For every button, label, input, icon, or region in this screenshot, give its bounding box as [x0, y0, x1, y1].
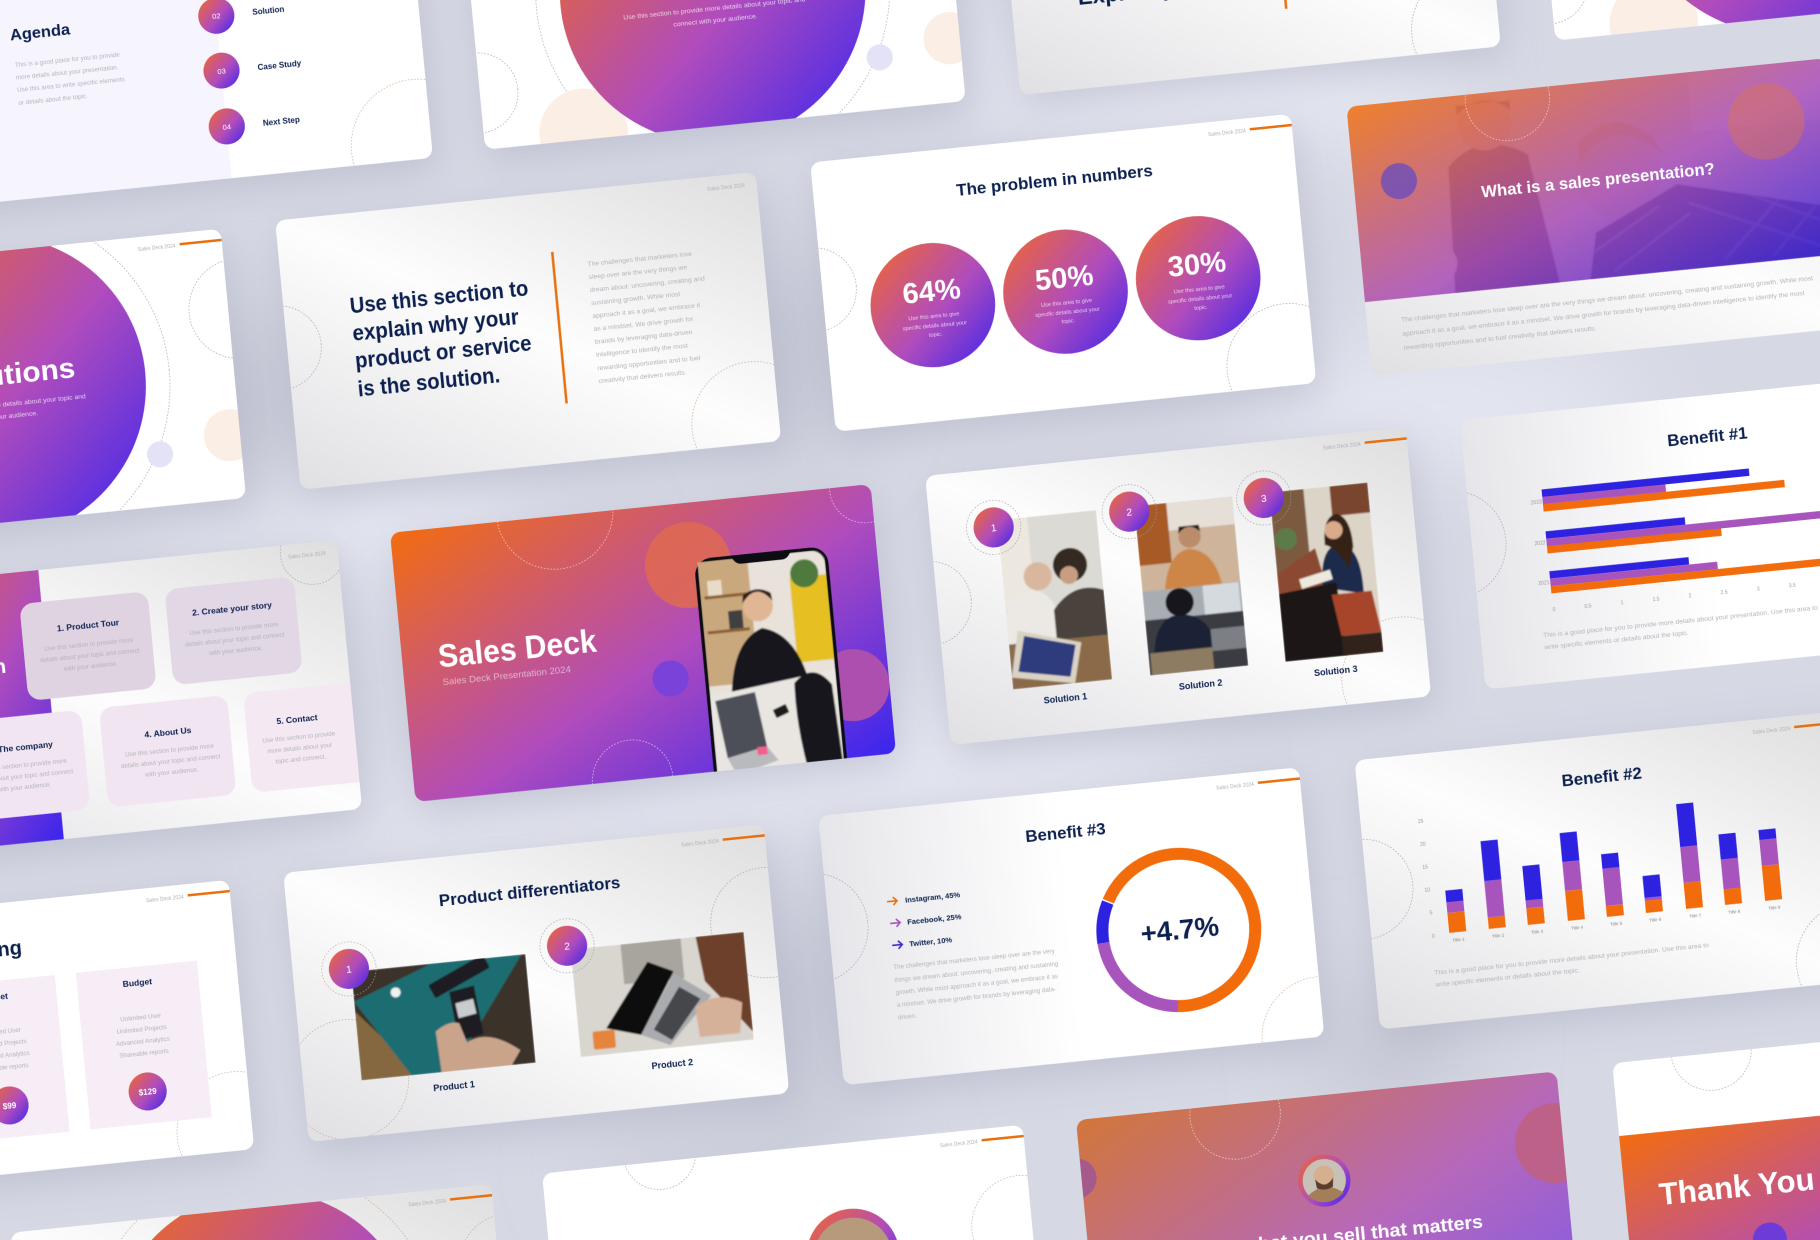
label: product 2: Product 2 — [651, 1057, 693, 1071]
card: contact: 5. Contact — [276, 712, 318, 726]
legend: instagram: Instagram, 45% — [905, 890, 961, 905]
agenda item 04: Next Step — [262, 115, 300, 128]
text: paragraph: The challenges that marketers lose sleep over are the very — [893, 948, 1056, 971]
stacked bar chart: 0 — [1432, 933, 1435, 940]
text: paragraph: rewarding opportunities and to fuel creativity that delivers results. — [1403, 325, 1597, 352]
number badge 2: 2 — [564, 942, 571, 953]
stacked bar chart: 10 — [1424, 888, 1431, 894]
panel: pricing slide: Sales Deck 2024 — [146, 895, 184, 904]
card: the company — [0, 710, 90, 822]
stacked bar chart: Title 4 — [1571, 924, 1584, 931]
card: about us: with your audience. — [144, 766, 199, 779]
heading: why your product: Use this section to — [349, 276, 529, 319]
number badge 3: 3 — [1261, 494, 1268, 505]
panel: benefit 1 slide — [1386, 371, 1820, 697]
heading: what is a sales presentation: What is a sales presentation? — [1480, 159, 1716, 202]
panel: sales deck cover slide — [384, 418, 934, 899]
stacked bar chart: Title 7 — [1689, 912, 1702, 919]
stacked bar chart: Title 8 — [1728, 908, 1741, 915]
round photo with gradient ring — [803, 1204, 903, 1240]
stacked bar chart: 5 — [1429, 910, 1433, 917]
card: create your story — [164, 576, 303, 685]
panel: benefit 3 slide — [747, 761, 1388, 1152]
stacked bar chart: Title 9 — [1768, 904, 1781, 911]
stat: 64%: specific details about your — [902, 320, 967, 332]
heading: why your product — [349, 276, 537, 401]
heading: benefit 2: Benefit #2 — [1561, 764, 1643, 791]
photo: two people with colour overlay — [1347, 58, 1820, 302]
heading: why your product: is the solution. — [357, 362, 501, 401]
text: agenda description: more details about your presentation. — [16, 64, 119, 82]
agenda item 02: Solution — [252, 5, 285, 17]
stacked bar chart — [1418, 784, 1783, 945]
horizontal bar chart: 2023 — [1530, 500, 1542, 507]
number badge 1 — [964, 498, 1023, 557]
number badge 2 — [1100, 482, 1159, 541]
text: paragraph: driven. — [898, 1012, 917, 1021]
stacked bar chart: 15 — [1422, 865, 1428, 871]
legend: facebook — [890, 912, 962, 928]
heading: product differentiators: Product differentiators — [438, 873, 621, 910]
text: chart description: write specific elements or details about the topic. — [1543, 630, 1689, 651]
panel: section slide top right — [1552, 0, 1820, 40]
panel: benefit 2 slide — [1300, 706, 1820, 1075]
horizontal bar chart: 2022 — [1534, 540, 1546, 548]
card: about us: 4. About Us — [144, 725, 192, 739]
panel: solutions photos slide: Sales Deck 2024 — [1323, 442, 1361, 452]
text: paragraph: growth. While most approach it as a goal, we embrace it as — [895, 973, 1058, 996]
panel: section slide bottom — [7, 1137, 581, 1240]
card: product tour: details about your topic and connect — [40, 647, 140, 664]
card: about us: Use this section to provide more — [125, 742, 215, 758]
card: product tour: Use this section to provide more — [44, 637, 134, 653]
panel: section slide bottom: Sales Deck 2024 — [408, 1199, 447, 1208]
agenda item 02: 02 — [212, 11, 221, 21]
stacked bar chart: 25 — [1418, 819, 1424, 825]
card: budget plan: Shareable reports — [119, 1048, 169, 1060]
heading: problem in numbers: The problem in numbers — [955, 161, 1153, 200]
panel: product differentiators slide: Sales Deck 2024 — [681, 839, 719, 849]
stat: 30%: Use this area to give — [1174, 285, 1225, 296]
heading: why your product: product or service — [354, 331, 532, 373]
agenda item 03: Case Study — [257, 58, 302, 72]
agenda item 04: 04 — [222, 122, 231, 132]
stat: 64%: topic. — [929, 331, 943, 339]
heading: benefit 1: Benefit #1 — [1666, 423, 1748, 450]
number badge 3 — [1234, 468, 1293, 528]
text: paragraph: The challenges that marketers lose — [587, 251, 692, 268]
horizontal bar chart — [1530, 449, 1820, 614]
text: section description: connect with your audience. — [673, 13, 758, 29]
legend: instagram — [887, 890, 961, 907]
photo: solution 3 — [1272, 482, 1384, 662]
photo: product 2 — [572, 932, 754, 1057]
stat: 50%: specific details about your — [1035, 306, 1100, 319]
legend: twitter — [892, 935, 953, 950]
label: solution 3: Solution 3 — [1314, 664, 1358, 678]
panel: pricing slide — [0, 875, 303, 1239]
legend: facebook: Facebook, 25% — [907, 912, 962, 927]
text: agenda description: or details about the topic. — [18, 93, 88, 107]
panel: section slide top — [471, 0, 965, 149]
card: about us — [99, 695, 236, 808]
stat: 30%: topic. — [1194, 304, 1208, 312]
text: paragraph: a mindset. We drive growth for brands by leveraging data- — [897, 986, 1056, 1009]
legend: twitter: Twitter, 10% — [909, 935, 953, 949]
horizontal bar chart: 2021 — [1538, 580, 1550, 587]
agenda item 02 — [197, 0, 286, 36]
text: paragraph: as a mindset. We drive growth for — [593, 316, 694, 333]
stacked bar chart: Title 3 — [1531, 928, 1544, 935]
horizontal bar chart: 0.5 — [1584, 603, 1592, 610]
card: create your story: details about your topic and connect — [185, 632, 285, 649]
card: contact: more details about your — [267, 742, 333, 755]
horizontal bar chart: 0 — [1552, 607, 1556, 613]
number badge 1: 1 — [990, 523, 998, 535]
donut chart: +4.7% — [1139, 911, 1220, 949]
panel: explain slide top — [1011, 0, 1500, 94]
phone mockup with photo — [694, 546, 856, 868]
panel: why your product slide: Sales Deck 2024 — [707, 183, 745, 193]
stat: 30% — [1130, 210, 1266, 346]
heading: benefit 3: Benefit #3 — [1025, 819, 1106, 846]
label: product 1: Product 1 — [433, 1079, 475, 1093]
card: target plan: $99 — [2, 1101, 17, 1111]
card: product tour — [19, 591, 157, 701]
horizontal bar chart: 3.5 — [1789, 583, 1796, 589]
stat: 50%: Use this area to give — [1041, 298, 1092, 309]
text: chart description: This is a good place for you to provide more details about your presentation. Use this area to — [1434, 942, 1709, 977]
stat: 50%: 50% — [1034, 260, 1095, 298]
number badge 1 — [319, 939, 379, 999]
card: contact: topic and connect. — [275, 753, 327, 765]
panel: problem in numbers slide: Sales Deck 2024 — [1208, 128, 1246, 138]
text: paragraph — [1401, 275, 1816, 352]
text: agenda description: This is a good place for you to provide — [15, 52, 121, 69]
stat: 50%: topic. — [1061, 318, 1076, 325]
stat: 50% — [998, 224, 1133, 360]
card: budget plan: Unlimited User — [120, 1013, 161, 1024]
agenda item 03: 03 — [217, 66, 226, 76]
text: paragraph: brands by leveraging data-driven — [595, 329, 693, 346]
number badge 2: 2 — [1126, 507, 1133, 519]
text: agenda description — [15, 51, 126, 107]
panel: topics slide — [0, 516, 383, 858]
text: paragraph: sustaining growth. While most — [591, 291, 681, 307]
text: paragraph: approach it as a goal, we embrace it — [592, 302, 701, 320]
stat: 64%: Use this area to give — [908, 312, 960, 323]
card: about us: details about your topic and connect — [121, 753, 221, 770]
text: paragraph: approach it as a goal, we embrace it as a mindset. We drive growth for brands by leveraging data-driven intelligence to identify the most — [1402, 290, 1805, 338]
stacked bar chart: 20 — [1420, 842, 1426, 848]
horizontal bar chart: 2 — [1688, 593, 1692, 599]
panel: benefit 3 slide: Sales Deck 2024 — [1216, 782, 1255, 792]
card: product tour: with your audience. — [63, 661, 118, 673]
stacked bar chart: Title 1 — [1452, 936, 1465, 943]
text: paragraph: dream about: uncovering, creating and — [590, 276, 705, 294]
panel: benefit 2 slide: Sales Deck 2024 — [1752, 726, 1791, 736]
heading: why your product: explain why your — [351, 304, 520, 346]
card: contact — [243, 680, 381, 793]
panel: thank you slide — [1608, 972, 1820, 1240]
panel: problem in numbers slide — [760, 110, 1357, 479]
number badge 2 — [537, 916, 597, 975]
panel: solutions section slide: Sales Deck 2024 — [138, 243, 176, 253]
subtitle: Sales Deck Presentation 2024 — [442, 665, 571, 687]
card: create your story: Use this section to provide more — [189, 621, 279, 637]
agenda item 03 — [203, 52, 302, 89]
text: paragraph: creativity that delivers results. — [598, 369, 687, 385]
panel: bottom photo slide — [538, 1077, 1088, 1240]
panel: solutions photos slide — [875, 423, 1472, 792]
panel: product differentiators slide — [268, 819, 838, 1146]
text: chart description: This is a good place for you to provide more details about your presentation. Use this area to — [1543, 604, 1818, 639]
text: paragraph — [893, 948, 1063, 1021]
number badge 1: 1 — [346, 965, 353, 976]
stat: 30%: 30% — [1166, 246, 1228, 284]
heading: thank you: Thank You — [1657, 1162, 1816, 1212]
text: paragraph: things we dream about: uncovering, creating and sustaining — [894, 960, 1059, 984]
text: section description — [0, 393, 87, 431]
text: paragraph: sleep over are the very things we — [588, 264, 688, 281]
text: paragraph: intelligence to identify the most — [596, 343, 688, 359]
card: target plan — [0, 975, 70, 1144]
heading: sales deck: Sales Deck — [436, 623, 598, 675]
donut chart — [1066, 817, 1291, 1043]
card: budget plan — [76, 961, 212, 1129]
stat: 64%: 64% — [901, 273, 962, 311]
panel: quote slide — [1048, 1033, 1614, 1240]
card: create your story: with your audience. — [208, 645, 263, 657]
stacked bar chart: Title 5 — [1610, 920, 1623, 927]
stat: 64% — [865, 237, 1001, 373]
card: budget plan: Budget — [122, 976, 153, 989]
horizontal bar chart: 3 — [1757, 586, 1760, 592]
panel: why your product slide — [225, 168, 822, 537]
card: budget plan: Advanced Analytics — [116, 1036, 170, 1048]
panel: bottom photo slide: Sales Deck 2024 — [940, 1139, 978, 1149]
horizontal bar chart: 1.5 — [1652, 596, 1660, 603]
panel: agenda slide — [0, 0, 432, 202]
text: paragraph — [587, 250, 714, 385]
panel: solutions section slide — [0, 230, 246, 523]
photo: solution 2 — [1136, 496, 1248, 676]
text: paragraph: rewarding opportunities and to fuel — [597, 355, 701, 372]
stat: 30%: specific details about your — [1168, 293, 1233, 305]
text: chart description: write specific elements or details about the topic. — [1434, 967, 1580, 989]
heading: agenda: Agenda — [9, 21, 72, 45]
horizontal bar chart: 1 — [1620, 600, 1624, 606]
label: solution 1: Solution 1 — [1043, 691, 1088, 705]
horizontal bar chart: 2.5 — [1720, 589, 1728, 596]
text: paragraph: The challenges that marketers lose sleep over are the very things we dream about: uncovering, creating and sustaining growth. While most — [1401, 275, 1813, 324]
card: budget plan: $129 — [138, 1087, 158, 1097]
label: solution 2: Solution 2 — [1178, 677, 1223, 692]
agenda item 04 — [208, 108, 300, 145]
avatar — [1296, 1152, 1353, 1209]
text: agenda description: Use this area to write specific elements — [17, 76, 125, 94]
photo: product 1 — [352, 954, 536, 1080]
photo: solution 1 — [1000, 510, 1112, 690]
card: contact: Use this section to provide — [262, 730, 336, 745]
stacked bar chart: Title 2 — [1492, 932, 1505, 939]
card: budget plan: Unlimited Projects — [117, 1024, 167, 1036]
panel: what is a sales presentation slide — [1328, 24, 1820, 378]
stacked bar chart: Title 6 — [1649, 916, 1662, 923]
panel: topics slide: Sales Deck 2024 — [288, 551, 326, 561]
card: product tour: 1. Product Tour — [56, 617, 120, 634]
card: create your story: 2. Create your story — [192, 600, 273, 618]
